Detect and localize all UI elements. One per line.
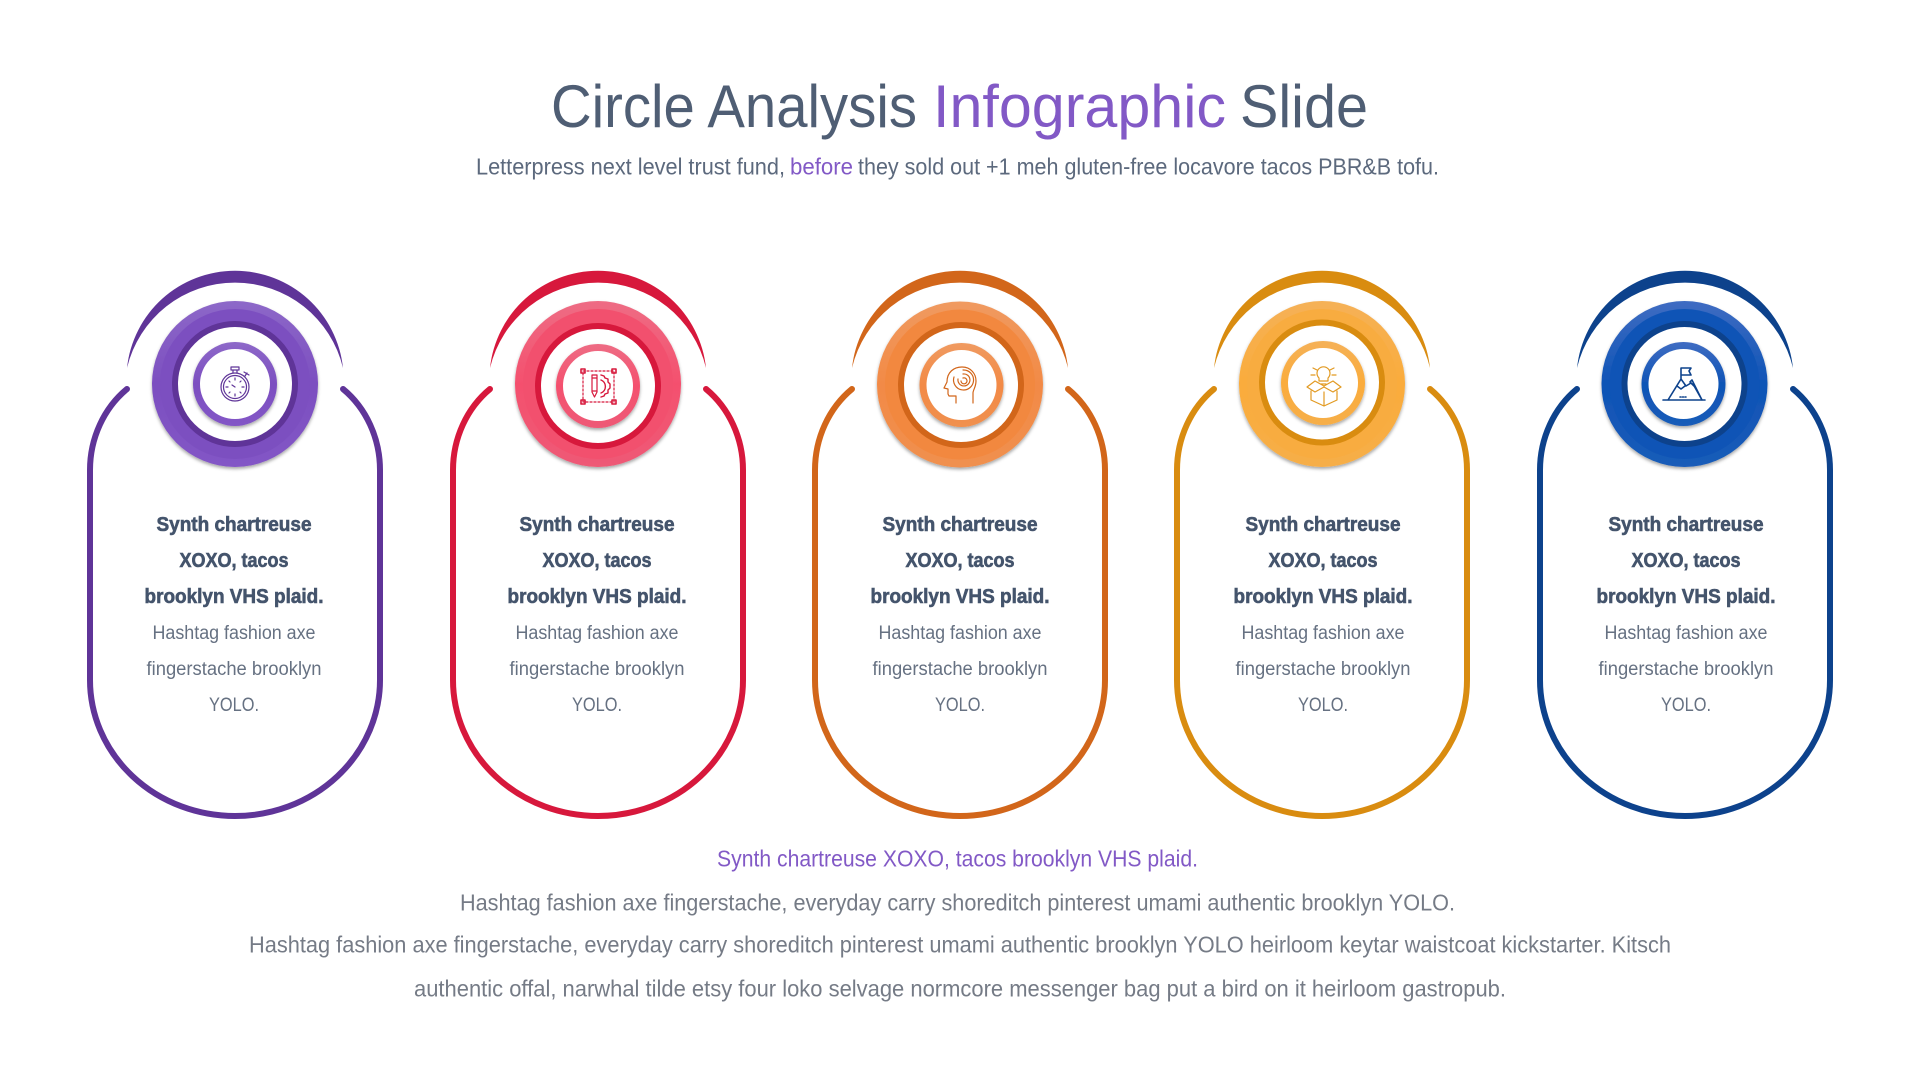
panel: card 4 amber [1177, 271, 1467, 816]
icon: mountain with flag [1663, 368, 1705, 400]
card 3 concentric rings [877, 302, 1043, 468]
card 4 body: fingerstache brooklyn [1236, 659, 1410, 680]
card 2 heading: XOXO, tacos [542, 550, 652, 572]
subtitle: Letterpress next level trust fund, [476, 154, 785, 180]
card 1 outline [90, 389, 380, 816]
card 2 heading: Synth chartreuse [520, 514, 674, 536]
card 5 heading: XOXO, tacos [1632, 550, 1740, 572]
card 2 heading [508, 514, 686, 608]
card 4 outline [1177, 389, 1467, 816]
panel: card 3 orange [815, 271, 1105, 816]
card 1 top crescent [127, 271, 343, 368]
card 2 outline [453, 389, 743, 816]
icon: stopwatch [221, 367, 249, 401]
card 3 body [872, 623, 1048, 716]
panel: card 1 purple [90, 271, 380, 816]
icon: pencil and gear in dotted frame [581, 369, 616, 404]
card 1 body: YOLO. [209, 695, 259, 716]
card 3 heading: XOXO, tacos [906, 550, 1014, 572]
card 3 heading: Synth chartreuse [882, 514, 1038, 536]
card 4 heading [1234, 514, 1412, 608]
card 5 top crescent [1577, 271, 1793, 368]
subtitle: before [790, 154, 853, 180]
card 1 heading: XOXO, tacos [180, 550, 288, 572]
card 1 body: fingerstache brooklyn [146, 659, 322, 680]
card 2 body: YOLO. [572, 695, 622, 716]
card 4 heading: Synth chartreuse [1246, 514, 1400, 536]
title: Slide [1240, 73, 1368, 140]
card 5 body [1598, 623, 1774, 716]
card 5 heading [1596, 514, 1776, 608]
footer paragraph: Hashtag fashion axe fingerstache, everyday carry shoreditch pinterest umami authentic brooklyn YOLO heirloom keytar waistcoat kickstarter. Kitsch [249, 932, 1671, 958]
card 3 body: Hashtag fashion axe [878, 623, 1042, 644]
card 2 concentric rings [515, 301, 681, 467]
footer paragraph: Hashtag fashion axe fingerstache, everyday carry shoreditch pinterest umami authentic brooklyn YOLO. [460, 890, 1455, 916]
footer paragraph: authentic offal, narwhal tilde etsy four loko selvage normcore messenger bag put a bird on it heirloom gastropub. [414, 976, 1506, 1002]
panel: card 2 red [453, 271, 743, 816]
icon: head with maze [944, 367, 976, 403]
footer paragraph [249, 890, 1671, 1002]
icon: box with light bulb [1307, 367, 1341, 406]
card 5 body: fingerstache brooklyn [1598, 659, 1774, 680]
card 4 body [1236, 623, 1410, 716]
card 2 body [510, 623, 684, 716]
card 3 outline [815, 389, 1105, 816]
card 1 body: Hashtag fashion axe [152, 623, 316, 644]
panel: card 5 blue [1540, 271, 1830, 816]
card 3 heading: brooklyn VHS plaid. [870, 586, 1050, 608]
card 1 heading [144, 514, 324, 608]
footer highlight line: Synth chartreuse XOXO, tacos brooklyn VHS plaid. [717, 846, 1198, 872]
card 2 top crescent [490, 271, 706, 368]
subtitle [476, 154, 1439, 180]
card 3 body: YOLO. [935, 695, 985, 716]
card 4 heading: XOXO, tacos [1268, 550, 1378, 572]
card 5 body: YOLO. [1661, 695, 1711, 716]
card 1 body [146, 623, 322, 716]
footer text block [249, 846, 1671, 1002]
subtitle: they sold out +1 meh gluten-free locavore tacos PBR&B tofu. [858, 154, 1439, 180]
card 5 heading: Synth chartreuse [1608, 514, 1764, 536]
card 4 top crescent [1214, 271, 1430, 368]
title: Infographic [933, 73, 1226, 140]
card 5 heading: brooklyn VHS plaid. [1596, 586, 1776, 608]
card 4 body: Hashtag fashion axe [1242, 623, 1404, 644]
title: Circle Analysis [551, 73, 917, 140]
card 5 concentric rings [1602, 301, 1768, 467]
card 3 top crescent [852, 271, 1068, 368]
card 2 body: fingerstache brooklyn [510, 659, 684, 680]
card 1 concentric rings [152, 301, 318, 467]
card 5 outline [1540, 389, 1830, 816]
title [551, 73, 1368, 140]
card 1 heading: Synth chartreuse [156, 514, 312, 536]
card 1 heading: brooklyn VHS plaid. [144, 586, 324, 608]
card 3 body: fingerstache brooklyn [872, 659, 1048, 680]
card 5 body: Hashtag fashion axe [1604, 623, 1768, 644]
card 2 heading: brooklyn VHS plaid. [508, 586, 686, 608]
card 4 heading: brooklyn VHS plaid. [1234, 586, 1412, 608]
card 4 concentric rings [1239, 301, 1405, 467]
card 2 body: Hashtag fashion axe [516, 623, 678, 644]
card 4 body: YOLO. [1298, 695, 1348, 716]
card 3 heading [870, 514, 1050, 608]
